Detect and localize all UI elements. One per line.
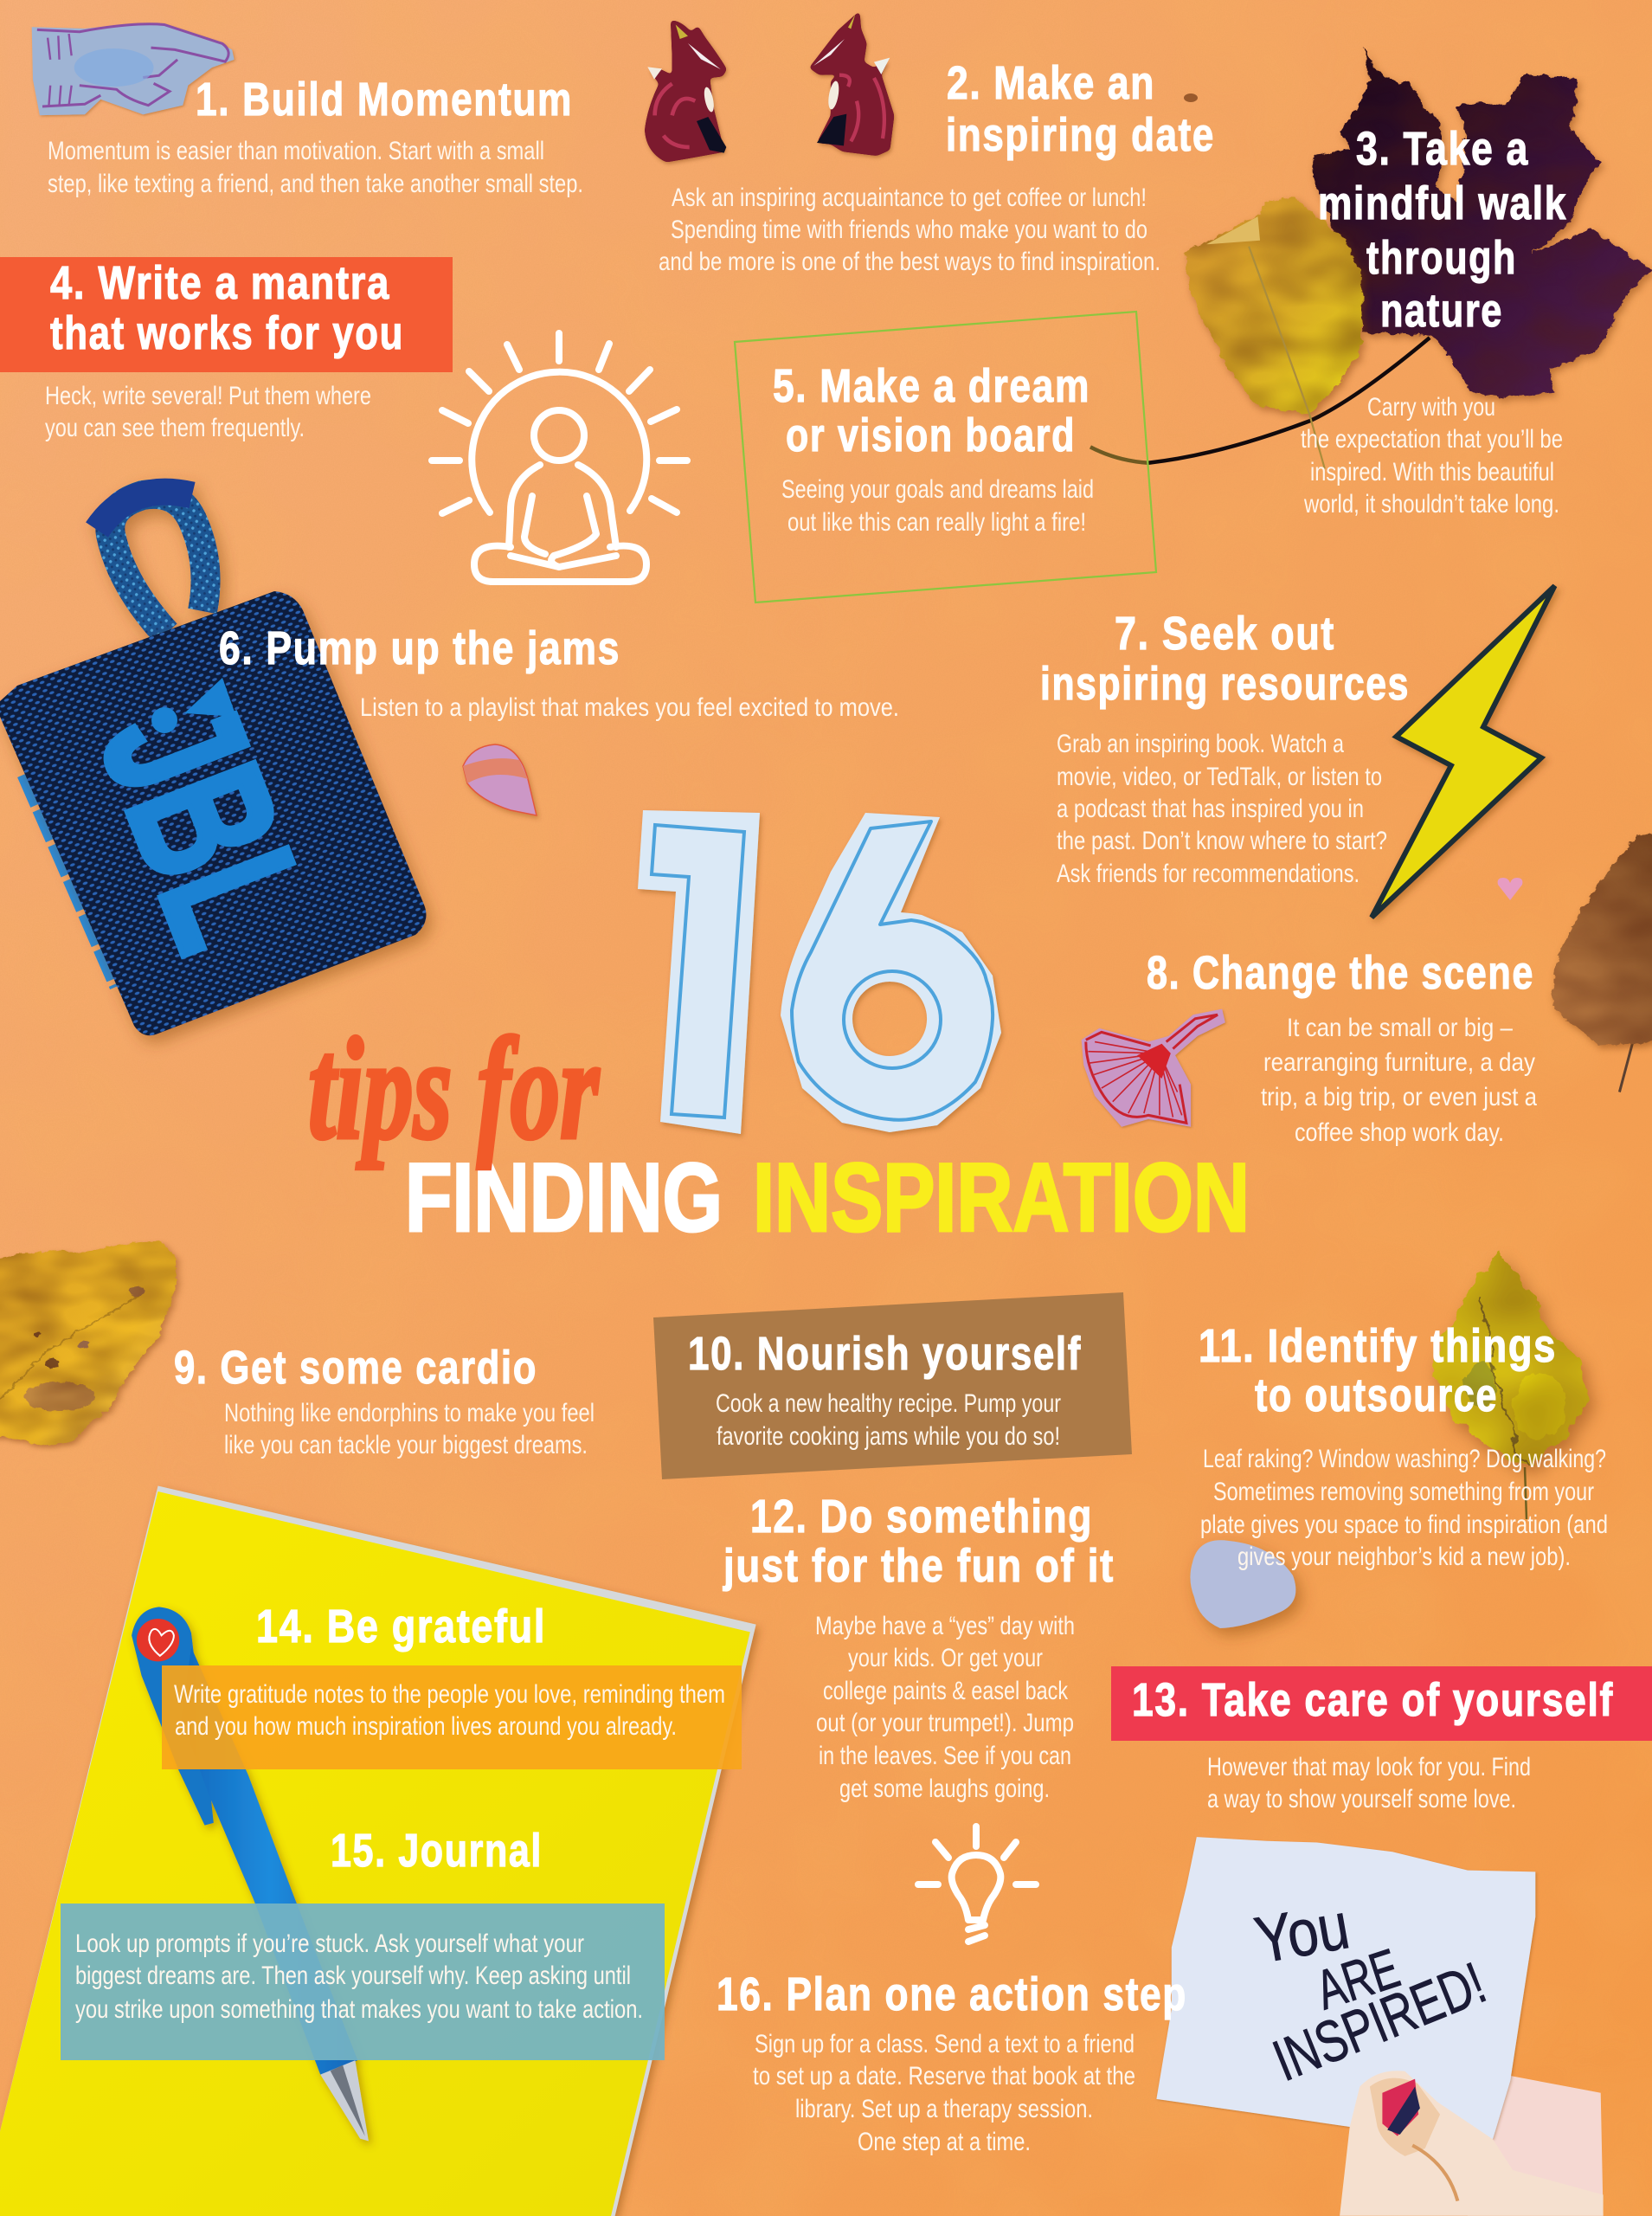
tip 10 panel: Nourish yourself: Cook a new healthy recipe. Pump your <box>716 1389 1061 1418</box>
illustration: brown leaf right edge <box>1552 833 1652 1092</box>
tip 7: Seek out inspiring resources: a podcast that has inspired you in <box>1057 795 1364 823</box>
tip 7: Seek out inspiring resources: Grab an inspiring book. Watch a <box>1057 730 1344 758</box>
tip 3: Take a mindful walk through nature: inspired. With this beautiful <box>1310 458 1554 486</box>
tip 1: Build Momentum: step, like texting a friend, and then take another small step. <box>48 170 583 198</box>
tip 2: Make an inspiring date: Spending time with friends who make you want to do <box>671 216 1147 244</box>
JBL logo: JBL <box>59 673 350 976</box>
title: FINDING INSPIRATION <box>405 1143 1250 1252</box>
tip 6: Pump up the jams <box>219 622 899 722</box>
illustration: ginkgo leaf cutout <box>1082 1009 1225 1127</box>
illustration: JBL speaker <box>0 492 426 1035</box>
banner: crimson <box>1111 1666 1652 1741</box>
torn paper note <box>1156 1837 1535 2139</box>
tip 2: Make an inspiring date <box>659 57 1215 276</box>
tip 3: Take a mindful walk through nature: nature <box>1380 285 1503 337</box>
numeral: 16 paper cutout <box>638 810 1001 1134</box>
tip 16: Plan one action step: library. Set up a therapy session. <box>795 2095 1093 2123</box>
icon: pink heart <box>1498 878 1522 900</box>
tip 5 panel: Make a dream or vision board: or vision board <box>786 409 1076 461</box>
tip 1: Build Momentum <box>48 74 583 198</box>
tip 15 panel: Journal <box>61 1825 665 2060</box>
tip 3: Take a mindful walk through nature: world, it shouldn’t take long. <box>1303 490 1559 519</box>
tip 5 panel: Make a dream or vision board: out like this can really light a fire! <box>787 508 1086 537</box>
tip 7: Seek out inspiring resources: 7. Seek out <box>1115 608 1335 660</box>
tip 8: Change the scene <box>1147 947 1537 1147</box>
tip 2: Make an inspiring date: inspiring date <box>946 109 1215 161</box>
tip 14 panel: Be grateful: Write gratitude notes to the people you love, reminding them <box>174 1680 725 1709</box>
tip 14 panel: Be grateful: 14. Be grateful <box>256 1601 546 1652</box>
tip 3: Take a mindful walk through nature: through <box>1366 232 1517 284</box>
tip 5 panel: Make a dream or vision board: 5. Make a dream <box>773 360 1090 412</box>
tip 4: Write a mantra that works for you: you can see them frequently. <box>45 414 305 442</box>
tip 3: Take a mindful walk through nature <box>1301 123 1567 519</box>
tip 12: Do something just for the fun of it: college paints & easel back <box>823 1677 1069 1705</box>
tip 12: Do something just for the fun of it: in the leaves. See if you can <box>819 1742 1071 1770</box>
tip 11: Identify things to outsource: to outsource <box>1255 1369 1498 1421</box>
tip 8: Change the scene: coffee shop work day. <box>1295 1118 1504 1147</box>
title: FINDING INSPIRATION: FINDING <box>405 1143 723 1252</box>
tip 9: Get some cardio <box>174 1342 595 1459</box>
tip 13: Take care of yourself: However that may look for you. Find <box>1207 1753 1531 1781</box>
tip 9: Get some cardio: 9. Get some cardio <box>174 1342 537 1394</box>
tip 7: Seek out inspiring resources <box>1040 608 1410 888</box>
icon: lightbulb <box>918 1826 1036 1942</box>
tip 12: Do something just for the fun of it: your kids. Or get your <box>848 1644 1043 1672</box>
tip 12: Do something just for the fun of it: Maybe have a “yes” day with <box>815 1612 1075 1640</box>
tip 9: Get some cardio: Nothing like endorphins to make you feel <box>224 1399 595 1427</box>
tip 2: Make an inspiring date: and be more is one of the best ways to find inspiration. <box>659 248 1160 276</box>
title: FINDING INSPIRATION: INSPIRATION <box>753 1143 1250 1252</box>
tip 10 panel: Nourish yourself: 10. Nourish yourself <box>688 1328 1082 1380</box>
tip 16: Plan one action step: to set up a date. Reserve that book at the <box>753 2062 1135 2090</box>
tip 8: Change the scene: It can be small or big – <box>1287 1014 1513 1042</box>
icon: pointing hand cutout <box>32 24 235 115</box>
tip 8: Change the scene: trip, a big trip, or even just a <box>1261 1083 1537 1111</box>
icon: meditating person with halo <box>432 333 687 582</box>
tilted green frame <box>735 312 1156 602</box>
speaker body <box>0 591 426 1035</box>
speaker loop <box>97 492 206 634</box>
illustration: yellow notebook <box>0 1485 756 2216</box>
icon: paper acorn <box>463 744 537 815</box>
tip 16: Plan one action step <box>717 1968 1187 2156</box>
tip 6: Pump up the jams: 6. Pump up the jams <box>219 622 620 674</box>
speck <box>1184 93 1198 102</box>
tip 5 panel: Make a dream or vision board: Seeing your goals and dreams laid <box>781 475 1094 504</box>
tilted brown panel <box>653 1292 1132 1479</box>
tip 11: Identify things to outsource <box>1199 1320 1608 1571</box>
tip 11: Identify things to outsource: 11. Identify things <box>1199 1320 1557 1372</box>
tip 15 panel: Journal: biggest dreams are. Then ask yourself why. Keep asking until <box>75 1962 631 1990</box>
tip 4: Write a mantra that works for you: Heck, write several! Put them where <box>45 382 371 410</box>
tip 1: Build Momentum: 1. Build Momentum <box>196 74 573 126</box>
tip 16: Plan one action step: 16. Plan one action step <box>717 1968 1187 2020</box>
tip 14 panel: Be grateful <box>162 1601 742 1769</box>
title: tips for script: tips for <box>308 1008 600 1169</box>
tip 6: Pump up the jams: Listen to a playlist that makes you feel excited to move. <box>360 693 899 722</box>
tip 3: Take a mindful walk through nature: Carry with you <box>1367 393 1495 422</box>
handwritten message <box>1250 1889 1495 2094</box>
tip 7: Seek out inspiring resources: movie, video, or TedTalk, or listen to <box>1057 763 1382 791</box>
tip 14 panel: Be grateful: and you how much inspiration lives around you already. <box>175 1712 677 1741</box>
tip 7: Seek out inspiring resources: inspiring resources <box>1040 658 1410 710</box>
tip 1: Build Momentum: Momentum is easier than motivation. Start with a small <box>48 137 544 165</box>
amber text box <box>162 1665 742 1769</box>
hand behind note <box>1468 2076 1604 2216</box>
handwritten message: You <box>1250 1889 1354 1978</box>
illustration: yellow leaf left <box>0 1240 177 1447</box>
icon: lightning bolt <box>1372 586 1555 918</box>
tip 15 panel: Journal: Look up prompts if you’re stuck. Ask yourself what your <box>75 1929 584 1958</box>
digit 1 <box>638 810 760 1134</box>
tip 11: Identify things to outsource: gives your neighbor’s kid a new job). <box>1237 1543 1571 1571</box>
digit 6 <box>781 813 1001 1132</box>
tip 15 panel: Journal: you strike upon something that makes you want to take action. <box>75 1995 643 2024</box>
tip 10 panel: Nourish yourself: favorite cooking jams while you do so! <box>717 1422 1060 1451</box>
tip 2: Make an inspiring date: Ask an inspiring acquaintance to get coffee or lunch! <box>672 184 1147 212</box>
illustration: pale blue stone <box>1190 1540 1295 1628</box>
tip 3: Take a mindful walk through nature: the expectation that you’ll be <box>1301 425 1563 454</box>
tip 13: Take care of yourself: a way to show yourself some love. <box>1207 1785 1516 1813</box>
tip 12: Do something just for the fun of it: get some laughs going. <box>839 1775 1050 1803</box>
tip 5 panel: Make a dream or vision board <box>735 312 1156 602</box>
tip 16: Plan one action step: One step at a time. <box>858 2128 1031 2156</box>
tip 8: Change the scene: 8. Change the scene <box>1147 947 1534 999</box>
JBL logo <box>59 673 350 976</box>
speaker side ribs <box>23 775 116 987</box>
tip 4: Write a mantra that works for you: that works for you <box>50 307 404 359</box>
tip 7: Seek out inspiring resources: Ask friends for recommendations. <box>1057 860 1360 888</box>
tip 10 panel: Nourish yourself <box>653 1292 1132 1479</box>
handwritten message: ARE <box>1308 1936 1407 2021</box>
tip 12: Do something just for the fun of it: out (or your trumpet!). Jump <box>816 1709 1074 1737</box>
handwritten message: INSPIRED! <box>1264 1950 1495 2094</box>
tip 7: Seek out inspiring resources: the past. Don’t know where to start? <box>1057 827 1387 855</box>
illustration: autumn leaves top right <box>1090 48 1652 469</box>
tip 3: Take a mindful walk through nature: 3. Take a <box>1356 123 1529 175</box>
illustration: two glass foxes <box>645 11 894 162</box>
tip 13: Take care of yourself <box>1111 1666 1652 1813</box>
tip 12: Do something just for the fun of it: just for the fun of it <box>723 1540 1115 1592</box>
tip 2: Make an inspiring date: 2. Make an <box>947 57 1155 109</box>
banner: red-orange <box>0 257 453 372</box>
tip 3: Take a mindful walk through nature: mindful walk <box>1318 177 1567 229</box>
tip 16: Plan one action step: Sign up for a class. Send a text to a friend <box>755 2030 1135 2058</box>
tip 9: Get some cardio: like you can tackle your biggest dreams. <box>224 1431 588 1459</box>
tip 12: Do something just for the fun of it: 12. Do something <box>750 1491 1093 1543</box>
tip 8: Change the scene: rearranging furniture, a day <box>1263 1048 1535 1077</box>
tip 4: Write a mantra that works for you <box>0 257 453 442</box>
thumb with painted nail <box>1340 2071 1604 2216</box>
tip 15 panel: Journal: 15. Journal <box>331 1825 543 1877</box>
tip 12: Do something just for the fun of it <box>723 1491 1115 1803</box>
teal text box <box>61 1904 665 2060</box>
illustration: yellow-green birch leaf <box>1432 1251 1587 1519</box>
tip 4: Write a mantra that works for you: 4. Write a mantra <box>50 257 390 309</box>
illustration: blue pen with heart button <box>132 1607 369 2141</box>
illustration: hand holding torn note <box>1156 1837 1604 2216</box>
